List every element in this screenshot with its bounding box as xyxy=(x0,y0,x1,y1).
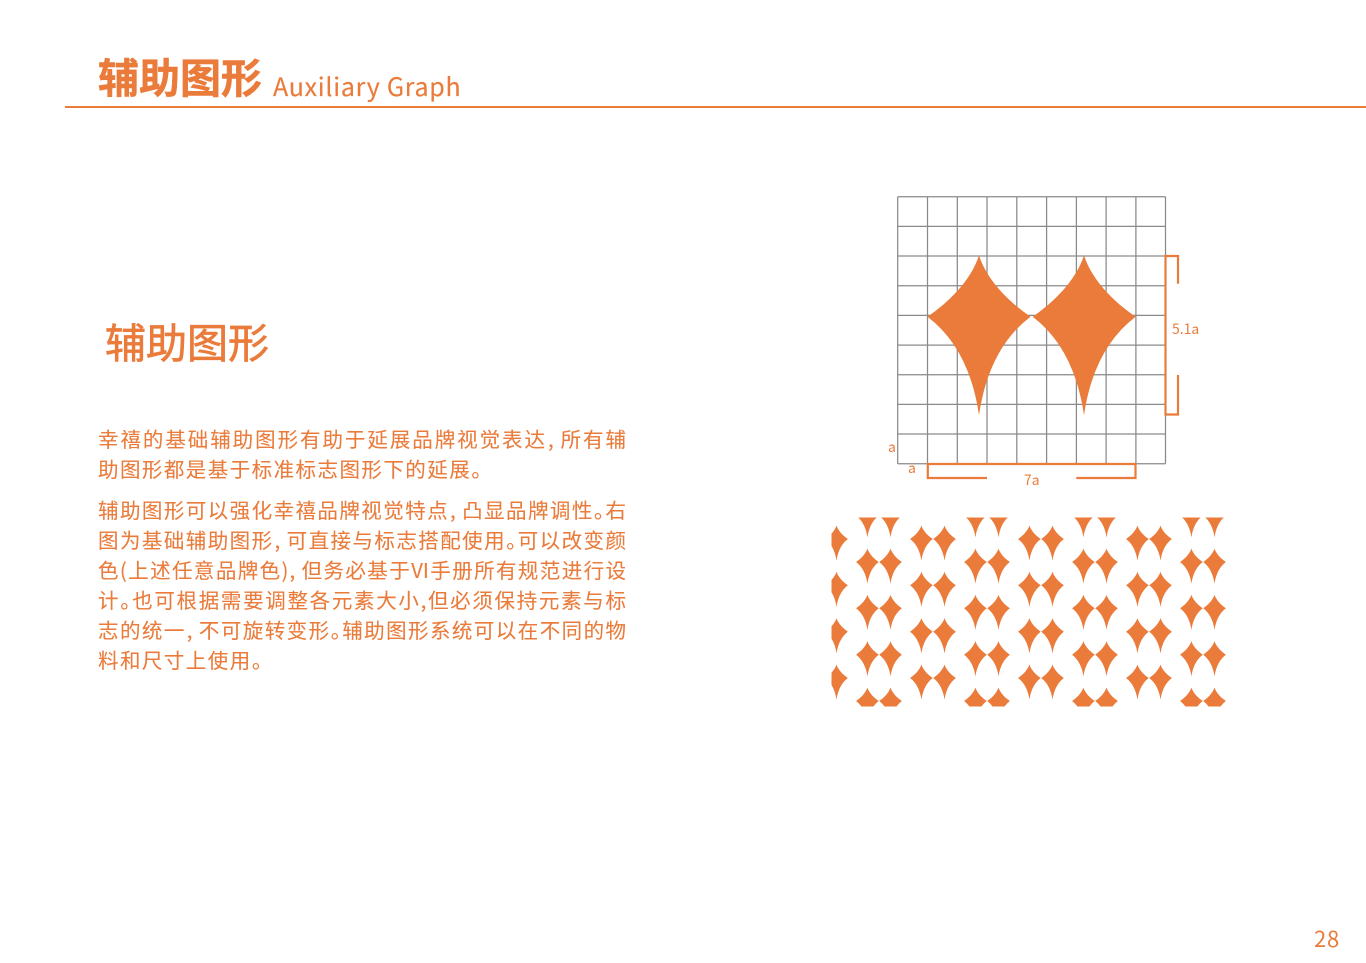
bottom bracket: 7a width xyxy=(928,464,1136,478)
header rule xyxy=(65,106,1366,108)
header subtitle: Auxiliary Graph xyxy=(273,68,461,104)
text block: intro paragraph: 助图形都是基于标准标志图形下的延展。 xyxy=(98,453,483,483)
right bracket: 5.1a height xyxy=(1166,256,1178,414)
large auxiliary graphic: twin diamonds xyxy=(927,255,1136,415)
text block: usage paragraph: 色(上述任意品牌色),但务必基于VI手册所有规范进行设 xyxy=(98,554,626,584)
header title: 辅助图形 xyxy=(98,44,262,104)
dimension label 7a: 7a xyxy=(1024,470,1040,490)
text block: usage paragraph: 料和尺寸上使用。 xyxy=(98,644,263,674)
repeating pattern of twin diamonds xyxy=(832,518,1226,706)
construction grid xyxy=(898,197,1166,464)
text block: usage paragraph: 志的统一,不可旋转变形。辅助图形系统可以在不同的物 xyxy=(98,614,626,644)
text block: usage paragraph: 计。也可根据需要调整各元素大小,但必须保持元素与标 xyxy=(98,584,626,614)
text block: usage paragraph: 图为基础辅助图形,可直接与标志搭配使用。可以改变颜 xyxy=(98,524,626,554)
page number: 28 xyxy=(1314,922,1340,954)
text block: intro paragraph: 幸禧的基础辅助图形有助于延展品牌视觉表达,所有辅 xyxy=(98,423,626,453)
dimension label a vertical: a xyxy=(888,437,896,457)
text block: usage paragraph xyxy=(98,494,626,674)
text block: usage paragraph: 辅助图形可以强化幸禧品牌视觉特点,凸显品牌调性。右 xyxy=(98,494,626,524)
section heading: 辅助图形 xyxy=(105,310,269,370)
text block: intro paragraph xyxy=(98,423,626,483)
dimension label 5.1a: 5.1a xyxy=(1172,319,1199,339)
dimension label a horizontal: a xyxy=(908,458,916,478)
